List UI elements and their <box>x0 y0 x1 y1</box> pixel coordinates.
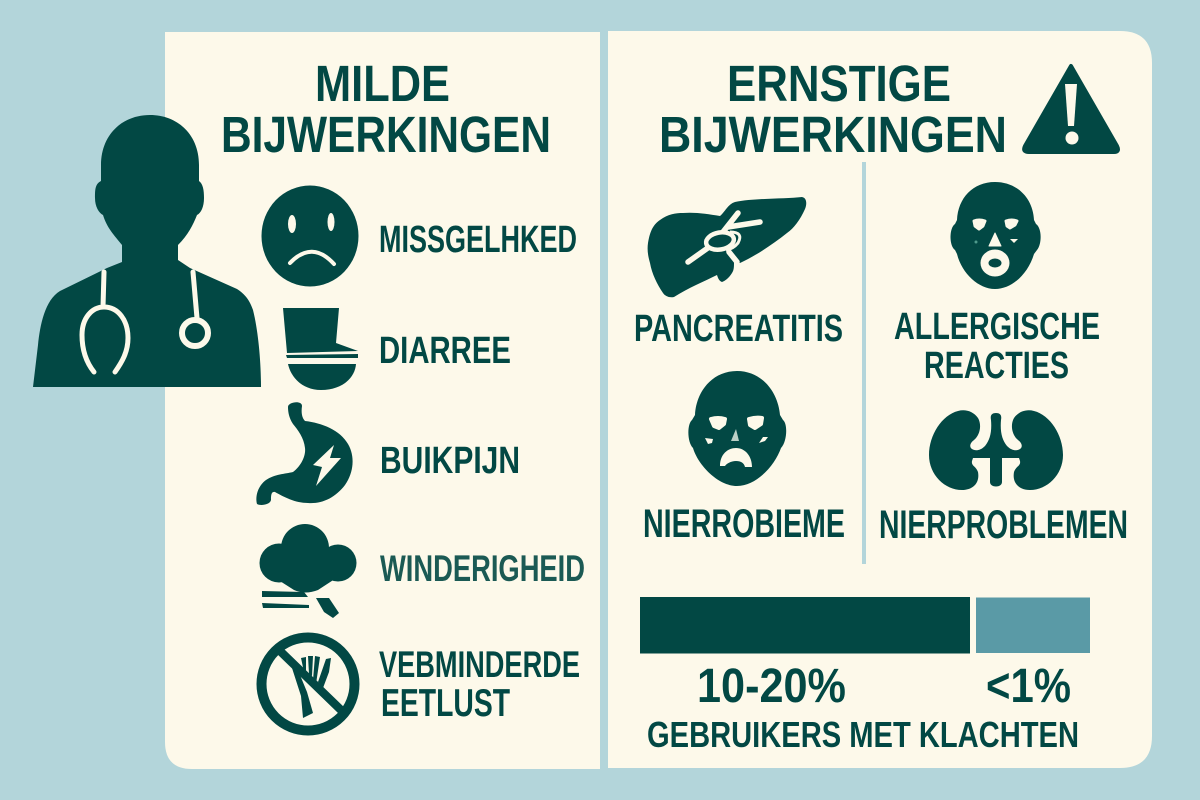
heading: serious side effects: BIJWERKINGEN <box>659 106 1007 163</box>
value: 10-20%: 10-20% <box>697 660 846 713</box>
label: nausea: MISSGELHKED <box>379 219 577 261</box>
vertical divider <box>862 162 866 564</box>
label: reduced appetite <box>379 644 580 725</box>
heading: serious side effects <box>659 55 1007 163</box>
bar: serious under 1% <box>976 598 1090 653</box>
icon: toilet <box>283 308 358 390</box>
icon: stomach with pain bolt <box>256 402 353 505</box>
icon: kidneys <box>929 410 1063 490</box>
label: flatulence: WINDERIGHEID <box>380 548 585 589</box>
label: kidney problems left: NIERROBIEME <box>643 502 845 546</box>
icon: warning triangle <box>1024 66 1118 152</box>
label: allergic reactions: REACTIES <box>924 345 1069 387</box>
caption: GEBRUIKERS MET KLACHTEN <box>647 714 1079 755</box>
heading: serious side effects: ERNSTIGE <box>727 55 951 112</box>
heading: mild side effects: MILDE <box>315 55 450 112</box>
heading: mild side effects <box>221 55 551 163</box>
icon: swollen allergic face <box>950 182 1041 289</box>
value: under 1%: <1% <box>986 660 1071 713</box>
panel: serious side effects <box>608 31 1152 768</box>
heading: mild side effects: BIJWERKINGEN <box>221 106 551 163</box>
label: reduced appetite: VEBMINDERDE <box>379 644 580 685</box>
icon: liver with ducts <box>648 197 806 297</box>
icon: distressed face <box>688 371 786 486</box>
label: abdominal pain: BUIKPIJN <box>380 440 520 482</box>
bar: mild 10-20% <box>640 597 970 654</box>
label: reduced appetite: EETLUST <box>381 682 510 725</box>
label: pancreatitis: PANCREATITIS <box>634 308 843 350</box>
icon: no appetite prohibition sign <box>262 638 354 730</box>
icon: sad face <box>262 186 358 286</box>
icon: gas cloud <box>260 524 356 618</box>
bar chart: share of users with complaints <box>640 597 1090 755</box>
label: allergic reactions <box>894 306 1100 387</box>
label: diarrhea: DIARREE <box>379 330 511 372</box>
icon: doctor with stethoscope <box>33 115 261 387</box>
label: allergic reactions: ALLERGISCHE <box>894 306 1100 348</box>
panel: mild side effects <box>165 32 600 769</box>
